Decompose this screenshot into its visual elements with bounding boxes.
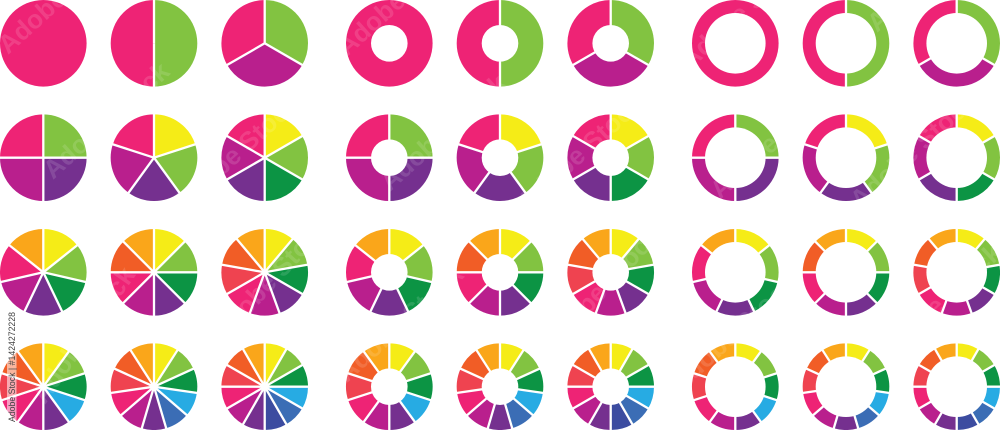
panel: thin ring charts xyxy=(691,0,1000,430)
ring chart: 7 segments xyxy=(692,228,778,312)
pie chart: 12 segments xyxy=(221,343,309,430)
faint diagonal stock watermark: Adobe Stock xyxy=(37,55,176,184)
pie chart: 2 segments xyxy=(132,0,176,87)
vertical stock image credit label: Adobe Stock | #1424272228 xyxy=(7,312,18,422)
donut chart: 12 segments xyxy=(567,343,655,430)
donut chart: 3 segments xyxy=(573,0,649,73)
faint diagonal stock watermark: Adobe Stock xyxy=(535,220,666,357)
faint diagonal stock watermark: Adobe Stock xyxy=(25,261,141,408)
ring chart: 1 segment xyxy=(692,0,779,87)
ring chart: 12 segments xyxy=(913,343,1000,430)
pie chart: 8 segments xyxy=(110,228,198,316)
pie chart: 6 segments xyxy=(227,114,303,202)
faint diagonal stock watermark: Adobe Stock xyxy=(167,87,306,216)
ring chart: 3 segments xyxy=(919,0,995,74)
pie chart: 3 segments xyxy=(227,0,303,73)
ring chart: 6 segments xyxy=(919,114,995,202)
faint diagonal stock watermark: Adobe Stock xyxy=(664,268,803,397)
ring chart: 9 segments xyxy=(913,228,1000,314)
pie chart: 9 segments xyxy=(221,228,308,314)
donut chart: 6 segments xyxy=(573,114,649,202)
pie chart: 11 segments xyxy=(110,343,198,429)
panel: solid pie charts xyxy=(0,0,309,430)
panel: donut charts xyxy=(345,0,655,430)
donut chart: 11 segments xyxy=(456,343,544,429)
donut chart: 10 segments xyxy=(347,343,431,430)
faint diagonal stock watermark: Adobe Stock xyxy=(704,75,843,204)
pie chart: 5 segments xyxy=(112,114,196,193)
ring chart: 2 segments xyxy=(816,0,876,87)
faint diagonal stock watermark: Adobe Stock xyxy=(844,85,983,214)
donut chart: 4 segments xyxy=(345,114,433,202)
pie chart: 10 segments xyxy=(1,343,85,430)
pie chart: 7 segments xyxy=(0,228,86,312)
ring chart: 10 segments xyxy=(693,343,777,430)
faint diagonal stock watermark: Adobe Stock xyxy=(374,67,513,196)
ring chart: 11 segments xyxy=(802,343,890,429)
faint diagonal stock watermark: Adobe Stock xyxy=(511,87,650,216)
pie chart: 4 segments xyxy=(0,114,87,202)
ring chart: 8 segments xyxy=(802,228,890,316)
ring chart: 4 segments xyxy=(691,114,779,202)
donut chart: 7 segments xyxy=(346,228,432,312)
donut chart: 8 segments xyxy=(456,228,544,316)
faint diagonal stock watermark: Adobe Stock xyxy=(331,258,470,387)
ring chart: 5 segments xyxy=(804,114,888,193)
faint diagonal stock watermark: Adobe Stock xyxy=(205,210,336,347)
pie chart: 1 segment xyxy=(0,0,87,87)
donut chart: 9 segments xyxy=(567,228,654,314)
donut chart: 5 segments xyxy=(458,114,542,193)
donut chart: 1 segment xyxy=(346,0,433,87)
donut chart: 2 segments xyxy=(478,0,522,87)
